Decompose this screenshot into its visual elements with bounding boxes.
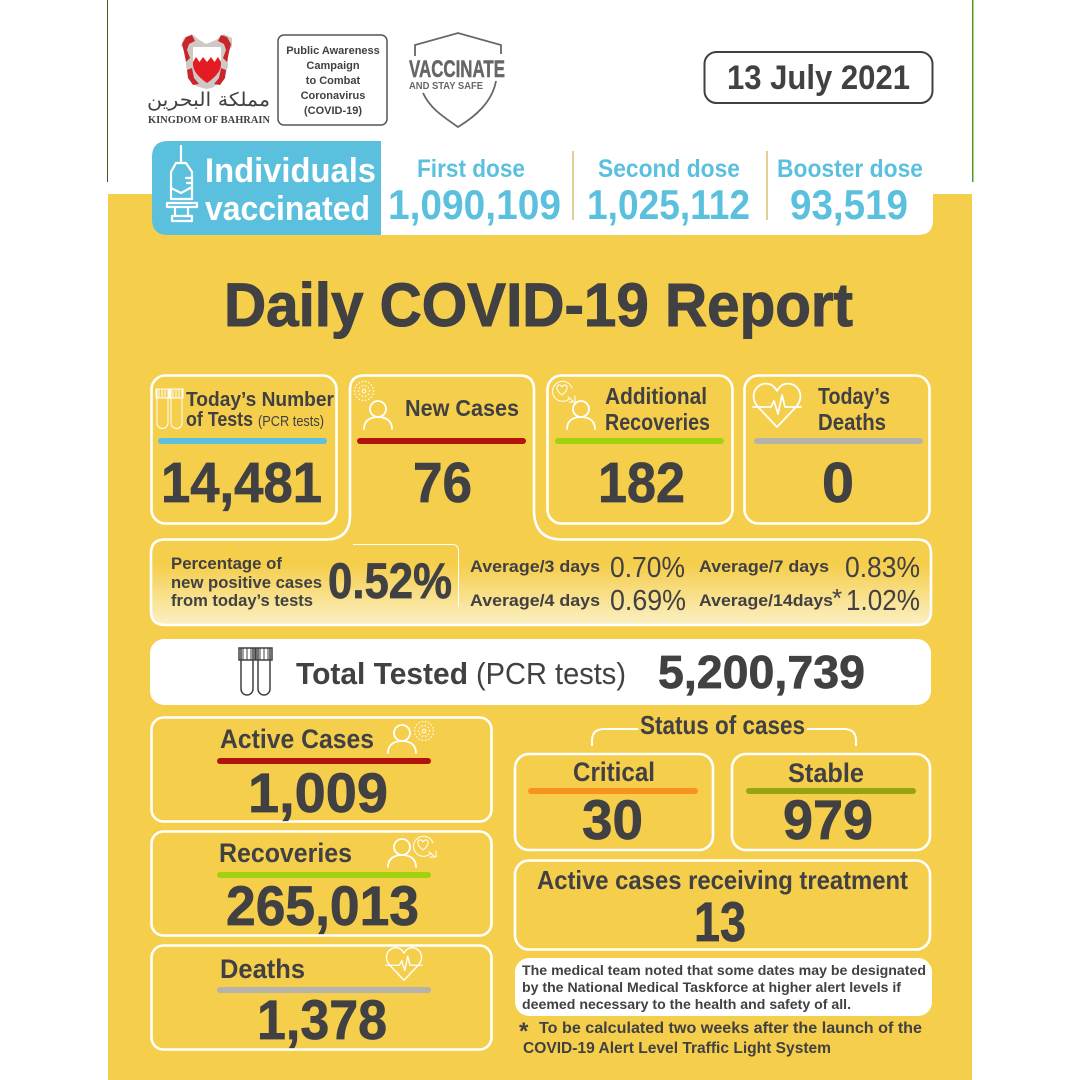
card: recoveries: 265,013 bbox=[226, 874, 419, 937]
date box: 13 July 2021 bbox=[727, 59, 910, 97]
card: additional recoveries: 182 bbox=[598, 451, 685, 515]
booster dose: Booster dose bbox=[777, 155, 923, 183]
label: percentage bbox=[171, 554, 322, 610]
panel: total tested: (PCR tests) bbox=[476, 656, 626, 691]
panel: positivity: 1.02% bbox=[846, 585, 920, 617]
panel: positivity: 0.52% bbox=[328, 553, 452, 609]
booster dose: 93,519 bbox=[790, 181, 908, 228]
campaign box: Coronavirus bbox=[301, 90, 365, 102]
panel: positivity: Average/7 days bbox=[699, 557, 829, 576]
percentage panel background bbox=[151, 539, 931, 625]
vaccinate shield logo bbox=[409, 33, 505, 127]
icon: heart bbox=[386, 948, 422, 980]
panel: total tested: 5,200,739 bbox=[658, 646, 865, 698]
label: percentage: new positive cases bbox=[171, 573, 322, 592]
icon: person bbox=[567, 401, 595, 429]
panel: positivity: 0.69% bbox=[610, 585, 686, 617]
card: treatment: 13 bbox=[694, 890, 746, 953]
campaign box: to Combat bbox=[306, 75, 361, 87]
icon: test tubes bbox=[239, 648, 272, 695]
panel: total tested bbox=[150, 639, 931, 705]
icon: heart bbox=[753, 384, 801, 427]
card: stable bbox=[732, 754, 930, 851]
second dose bbox=[587, 155, 750, 228]
card: stable: 979 bbox=[783, 788, 873, 851]
card: today's tests: 14,481 bbox=[161, 451, 322, 515]
card: treatment bbox=[515, 860, 930, 953]
card: recoveries bbox=[152, 832, 492, 937]
card: deaths: 1,378 bbox=[257, 988, 387, 1051]
panel: positivity bbox=[171, 544, 920, 617]
logo: Kingdom of Bahrain bbox=[147, 34, 270, 126]
card: new cases with connecting outline: New Cases bbox=[405, 395, 519, 421]
icon: person bbox=[388, 839, 416, 867]
campaign box: Campaign bbox=[306, 60, 360, 72]
vaccinate shield logo: VACCINATE bbox=[409, 56, 505, 83]
card: additional recoveries bbox=[548, 376, 732, 524]
card: today's tests: of Tests bbox=[186, 409, 253, 431]
panel: positivity: * bbox=[832, 583, 842, 613]
card: today's tests bbox=[152, 376, 336, 524]
icon: recovery heart bbox=[553, 381, 575, 402]
card: additional recoveries: Recoveries bbox=[605, 409, 710, 435]
note: medical team: deemed necessary to the health and safety of all. bbox=[522, 997, 851, 1012]
first dose: 1,090,109 bbox=[388, 181, 561, 228]
note: medical team: The medical team noted that some dates may be designated bbox=[522, 963, 926, 978]
heading: status of cases: Status of cases bbox=[640, 710, 805, 740]
card: today's deaths bbox=[744, 376, 930, 524]
card: additional recoveries: Additional bbox=[605, 383, 707, 409]
footnote: COVID-19 Alert Level Traffic Light System bbox=[523, 1040, 831, 1057]
card: new cases with connecting outline: 76 bbox=[413, 451, 472, 515]
logo: Kingdom of Bahrain: KINGDOM OF BAHRAIN bbox=[148, 115, 270, 126]
card: today's tests: (PCR tests) bbox=[258, 414, 324, 430]
second dose: Second dose bbox=[598, 155, 740, 183]
card: critical: 30 bbox=[582, 788, 643, 851]
label: percentage: Percentage of bbox=[171, 554, 282, 573]
card: deaths: Deaths bbox=[220, 954, 305, 984]
icon: person bbox=[364, 401, 392, 429]
card: today's tests: Today’s Number bbox=[186, 389, 334, 411]
icon: recovery heart bbox=[414, 836, 436, 857]
vaccinate shield logo: AND STAY SAFE bbox=[409, 81, 483, 92]
card: active cases bbox=[152, 718, 492, 824]
note: medical team: by the National Medical Taskforce at higher alert levels if bbox=[522, 980, 902, 995]
icon: test tubes bbox=[156, 389, 183, 428]
card: critical: Critical bbox=[573, 757, 655, 787]
heading: status of cases bbox=[592, 710, 856, 746]
second dose: 1,025,112 bbox=[587, 181, 750, 228]
individuals vaccinated block bbox=[152, 141, 381, 235]
vaccination panel bbox=[152, 141, 933, 235]
campaign box: Public Awareness bbox=[286, 45, 380, 57]
card: deaths bbox=[152, 946, 492, 1051]
card: stable: Stable bbox=[788, 758, 864, 788]
date box bbox=[704, 52, 932, 103]
footnote bbox=[519, 1018, 922, 1057]
card: today's deaths: Deaths bbox=[818, 409, 886, 435]
panel: positivity: 0.70% bbox=[610, 552, 685, 584]
card: active cases: 1,009 bbox=[248, 761, 388, 824]
logo: Kingdom of Bahrain: مملكة البحرين bbox=[147, 89, 270, 111]
panel: positivity: 0.83% bbox=[845, 552, 920, 584]
icon: coat of arms bbox=[181, 34, 232, 89]
icon: person bbox=[388, 725, 416, 753]
note: medical team bbox=[515, 958, 932, 1016]
panel: positivity: Average/3 days bbox=[470, 557, 600, 576]
individuals vaccinated block: Individuals bbox=[205, 152, 376, 190]
footnote: To be calculated two weeks after the launch of the bbox=[539, 1020, 922, 1037]
booster dose bbox=[777, 155, 923, 228]
card: today's deaths: 0 bbox=[822, 451, 854, 515]
footnote: * bbox=[519, 1018, 529, 1045]
icon: virus bbox=[414, 722, 434, 740]
icon: virus bbox=[354, 382, 374, 400]
card: treatment: Active cases receiving treatment bbox=[537, 865, 908, 895]
icon: syringe bbox=[167, 146, 197, 221]
first dose bbox=[388, 155, 561, 228]
title: Daily COVID-19 Report bbox=[224, 271, 853, 339]
panel: positivity: Average/14days bbox=[699, 591, 833, 610]
card: new cases with connecting outline bbox=[151, 376, 931, 625]
label: percentage: from today’s tests bbox=[171, 591, 313, 610]
panel: total tested: Total Tested bbox=[296, 656, 468, 691]
card: active cases: Active Cases bbox=[220, 724, 374, 754]
card: today's deaths: Today’s bbox=[818, 383, 890, 409]
campaign box bbox=[278, 35, 387, 125]
card: critical bbox=[515, 754, 713, 851]
card: recoveries: Recoveries bbox=[219, 838, 352, 868]
individuals vaccinated block: vaccinated bbox=[205, 190, 370, 228]
panel: positivity: Average/4 days bbox=[470, 591, 600, 610]
campaign box: (COVID-19) bbox=[304, 105, 362, 117]
first dose: First dose bbox=[417, 155, 525, 183]
